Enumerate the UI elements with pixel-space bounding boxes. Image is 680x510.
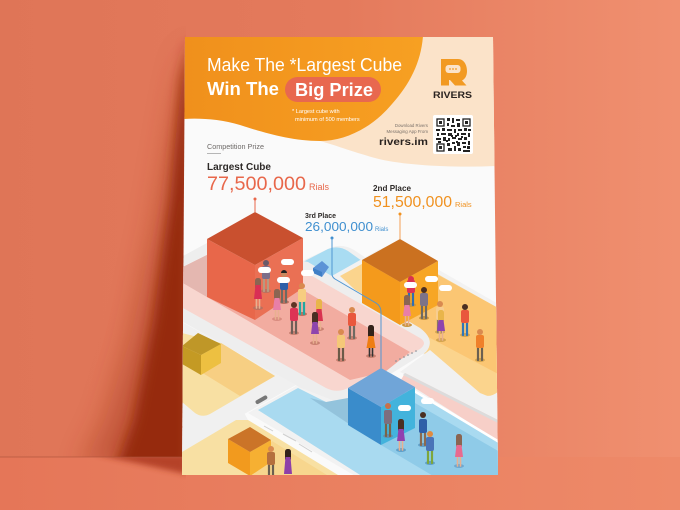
person <box>347 307 357 340</box>
footnote: * Largest cube with <box>292 109 340 115</box>
label: 3rd place prize <box>305 212 388 233</box>
label: largest cube prize: 77,500,000 <box>207 173 306 195</box>
download text: rivers.im <box>379 136 428 148</box>
person <box>460 304 470 337</box>
people: blue queue <box>383 403 464 468</box>
icon: small blue cube <box>313 261 329 277</box>
person <box>475 329 485 362</box>
person <box>383 403 393 438</box>
logo: Rivers <box>433 59 472 100</box>
connector: 3rd place line <box>330 236 381 372</box>
floor <box>0 457 680 510</box>
title <box>207 54 402 102</box>
person <box>418 412 428 447</box>
people: yellow queue <box>267 446 292 476</box>
label: 2nd place prize: 51,500,000 <box>373 194 452 211</box>
icon: small orange cube <box>228 427 271 476</box>
footnote: minimum of 500 members <box>295 117 360 123</box>
person <box>454 434 464 468</box>
title: Win The <box>207 78 279 99</box>
QR code <box>433 115 473 154</box>
person <box>366 325 376 358</box>
panel: orange header wave <box>183 36 423 141</box>
footnote <box>292 109 360 121</box>
label: largest cube prize <box>207 162 330 195</box>
person <box>419 287 429 320</box>
logo: Rivers: RIVERS <box>433 90 472 100</box>
person <box>396 419 406 452</box>
icon: blue cube (3rd) <box>348 368 415 445</box>
person <box>272 289 282 321</box>
label: 3rd place prize: 3rd Place <box>305 211 336 220</box>
person <box>336 329 346 362</box>
big prize pill: Big Prize <box>295 79 373 100</box>
label: 2nd place prize: 2nd Place <box>373 183 411 193</box>
label: competition prize: Competition Prize <box>207 142 264 151</box>
poster shadow on floor <box>95 454 186 474</box>
panel: blue phone bottom <box>258 388 498 475</box>
label: 3rd place prize: Rials <box>375 227 388 233</box>
person <box>289 302 299 335</box>
panel: bottom yellow phone <box>182 414 338 475</box>
person <box>279 270 289 304</box>
icon: red cube (largest) <box>207 198 303 320</box>
panel: blue phone top <box>303 246 364 276</box>
person <box>406 276 416 307</box>
download text: Messaging App From <box>386 129 428 134</box>
people: orange queue <box>402 276 485 362</box>
person <box>316 299 324 331</box>
icon: orange cube (2nd) <box>362 212 438 325</box>
panel: yellow phone <box>182 323 296 428</box>
speech bubbles <box>258 259 452 411</box>
icon: yellow cube <box>182 333 221 375</box>
label: largest cube prize: Rials <box>309 182 330 192</box>
download text <box>380 124 428 145</box>
label: 2nd place prize: Rials <box>455 200 472 209</box>
label: 3rd place prize: 26,000,000 <box>305 220 373 234</box>
people: red queue <box>253 260 376 362</box>
person <box>261 260 271 293</box>
person <box>402 295 412 327</box>
person <box>267 446 275 476</box>
panel: pink phone <box>183 243 430 404</box>
person <box>253 278 263 310</box>
panel: lower white phone frame <box>400 350 500 421</box>
person <box>297 283 307 316</box>
person <box>436 310 446 342</box>
panel: orange phone <box>332 260 498 400</box>
label: competition prize <box>207 144 264 154</box>
panel: peach header <box>320 36 496 167</box>
person <box>435 301 445 334</box>
person <box>284 449 292 474</box>
title: Make The *Largest Cube <box>207 54 402 75</box>
download text: Download Rivers <box>395 123 429 128</box>
panel: pale pink lower strip <box>401 376 498 440</box>
poster shadow on wall <box>80 37 190 470</box>
person <box>310 312 320 345</box>
label: largest cube prize: Largest Cube <box>207 162 272 173</box>
person <box>425 431 435 465</box>
poster <box>180 35 500 480</box>
label: 2nd place prize <box>373 185 472 209</box>
big prize pill <box>285 77 381 102</box>
